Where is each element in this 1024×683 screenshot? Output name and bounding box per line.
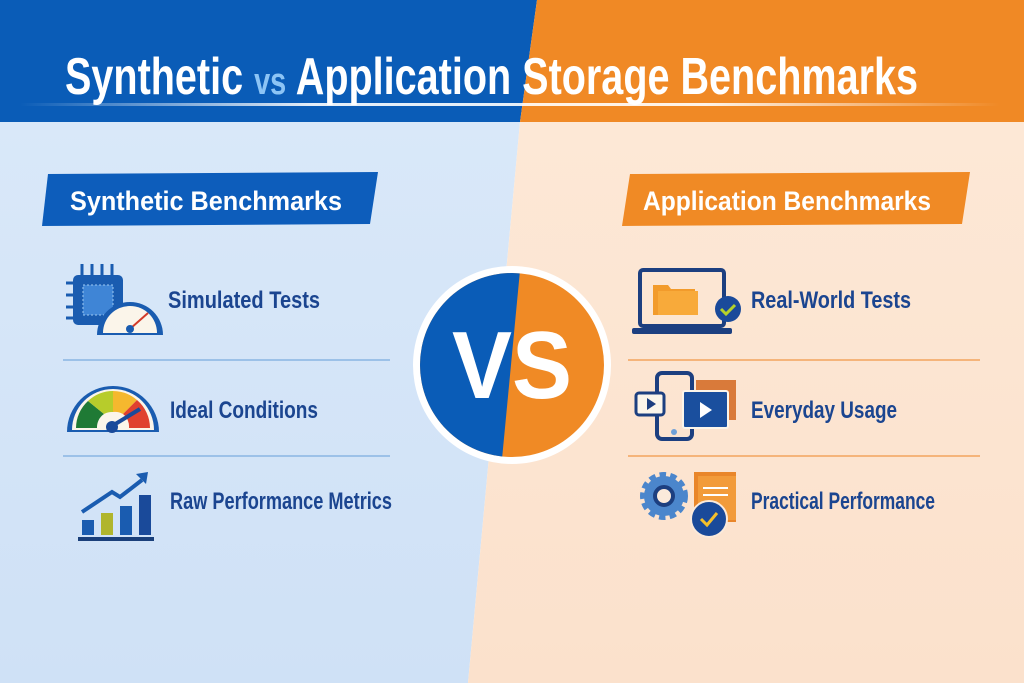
text: ideal conditions: Ideal Conditions: [170, 397, 318, 424]
text: practical performance: Practical Performance: [751, 488, 935, 515]
icon: chip with gauge: [66, 264, 163, 335]
label: application benchmarks: [622, 172, 970, 226]
label: synthetic benchmarks: [42, 172, 378, 226]
icon: bar chart with arrow: [78, 472, 154, 541]
text: simulated tests: Simulated Tests: [168, 287, 320, 314]
VS badge: VS: [452, 312, 572, 419]
label: application benchmarks: Application Benchmarks: [643, 186, 931, 216]
text: raw performance metrics: Raw Performance Metrics: [170, 488, 392, 515]
icon: gear with documents: [644, 472, 736, 537]
icon: colorful gauge: [67, 386, 159, 433]
text: real-world tests: Real-World Tests: [751, 287, 911, 314]
label: synthetic benchmarks: Synthetic Benchmarks: [70, 186, 342, 216]
text: everyday usage: Everyday Usage: [751, 397, 897, 424]
icon: laptop with folder: [632, 270, 741, 334]
dividers: [63, 360, 980, 456]
header band: [0, 0, 1024, 122]
icon: devices with video: [636, 373, 736, 439]
VS badge: [413, 266, 611, 464]
